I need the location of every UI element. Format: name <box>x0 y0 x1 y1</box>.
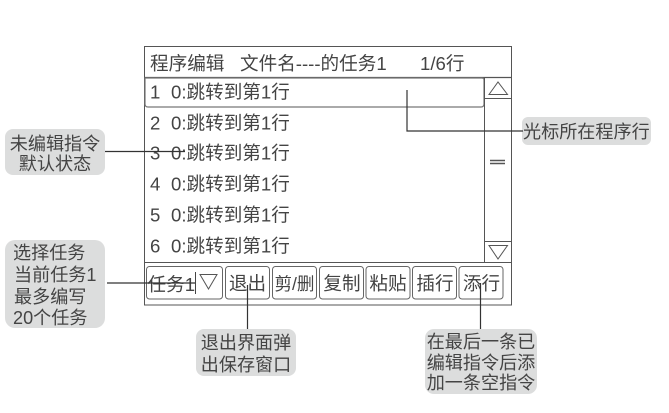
callout: cursor row: 光标所在程序行 <box>523 122 650 142</box>
callout: exit: 退出界面弹 <box>201 333 291 353</box>
window header <box>145 53 511 78</box>
button: task selector: 任务1 <box>148 274 195 295</box>
program rows: 5 <box>150 204 160 226</box>
button: exit <box>226 266 270 299</box>
selected row highlight <box>145 78 484 107</box>
button: copy <box>320 266 364 299</box>
button: add row <box>459 266 503 299</box>
window header: 文件名----的任务1 <box>240 53 387 74</box>
icon: scroll up arrow <box>489 82 508 94</box>
leader line: cursor row <box>407 90 523 131</box>
button: task selector <box>146 266 222 299</box>
leader line: select task <box>107 282 195 284</box>
program rows: 6 <box>150 236 160 256</box>
button: paste <box>366 266 410 299</box>
callout: add row: 编辑指令后添 <box>427 353 535 373</box>
button: cut delete <box>272 266 316 299</box>
window header: 程序编辑 <box>150 53 224 74</box>
leader line: add row <box>480 283 482 329</box>
button: cut delete: 剪/删 <box>274 274 315 294</box>
program rows: 0:跳转到第1行 <box>171 236 290 256</box>
program rows: 0:跳转到第1行 <box>171 142 290 164</box>
program rows: 0:跳转到第1行 <box>171 82 290 102</box>
icon: scroll thumb <box>490 160 505 164</box>
button: insert row: 插行 <box>416 273 454 294</box>
toolbar <box>145 262 511 299</box>
callout: select task: 20个任务 <box>13 308 87 328</box>
button: add row: 添行 <box>463 273 500 294</box>
scrollbar <box>484 78 511 262</box>
program editor window <box>144 46 512 305</box>
window header: 1/6行 <box>420 53 464 74</box>
callout: add row <box>425 329 537 394</box>
program rows <box>150 82 290 256</box>
button: paste: 粘贴 <box>369 273 407 294</box>
program rows: 1 <box>150 82 160 102</box>
callout: add row: 加一条空指令 <box>427 373 535 393</box>
button: insert row <box>412 266 456 299</box>
program rows: 4 <box>150 174 160 194</box>
callout: exit <box>196 329 296 376</box>
callout: exit: 出保存窗口 <box>201 355 291 375</box>
program rows: 2 <box>150 112 160 134</box>
program rows: 0:跳转到第1行 <box>171 204 290 226</box>
callout: select task: 最多编写 <box>14 287 86 307</box>
leader line: exit <box>246 285 248 329</box>
program rows: 0:跳转到第1行 <box>171 112 290 134</box>
callout: add row: 在最后一条已 <box>427 332 535 352</box>
program rows: 0:跳转到第1行 <box>171 174 290 194</box>
callout: default state: 默认状态 <box>19 154 91 174</box>
button: copy: 复制 <box>323 273 361 294</box>
leader line: default state <box>105 150 185 152</box>
button: exit: 退出 <box>229 273 266 294</box>
program rows: 3 <box>150 142 160 164</box>
callout: default state: 未编辑指令 <box>10 134 100 154</box>
callout: select task <box>5 240 105 328</box>
callout: default state <box>5 129 105 175</box>
icon: scroll down arrow <box>489 246 508 259</box>
callout: select task: 选择任务 <box>13 243 85 263</box>
callout: select task: 当前任务1 <box>14 265 96 285</box>
